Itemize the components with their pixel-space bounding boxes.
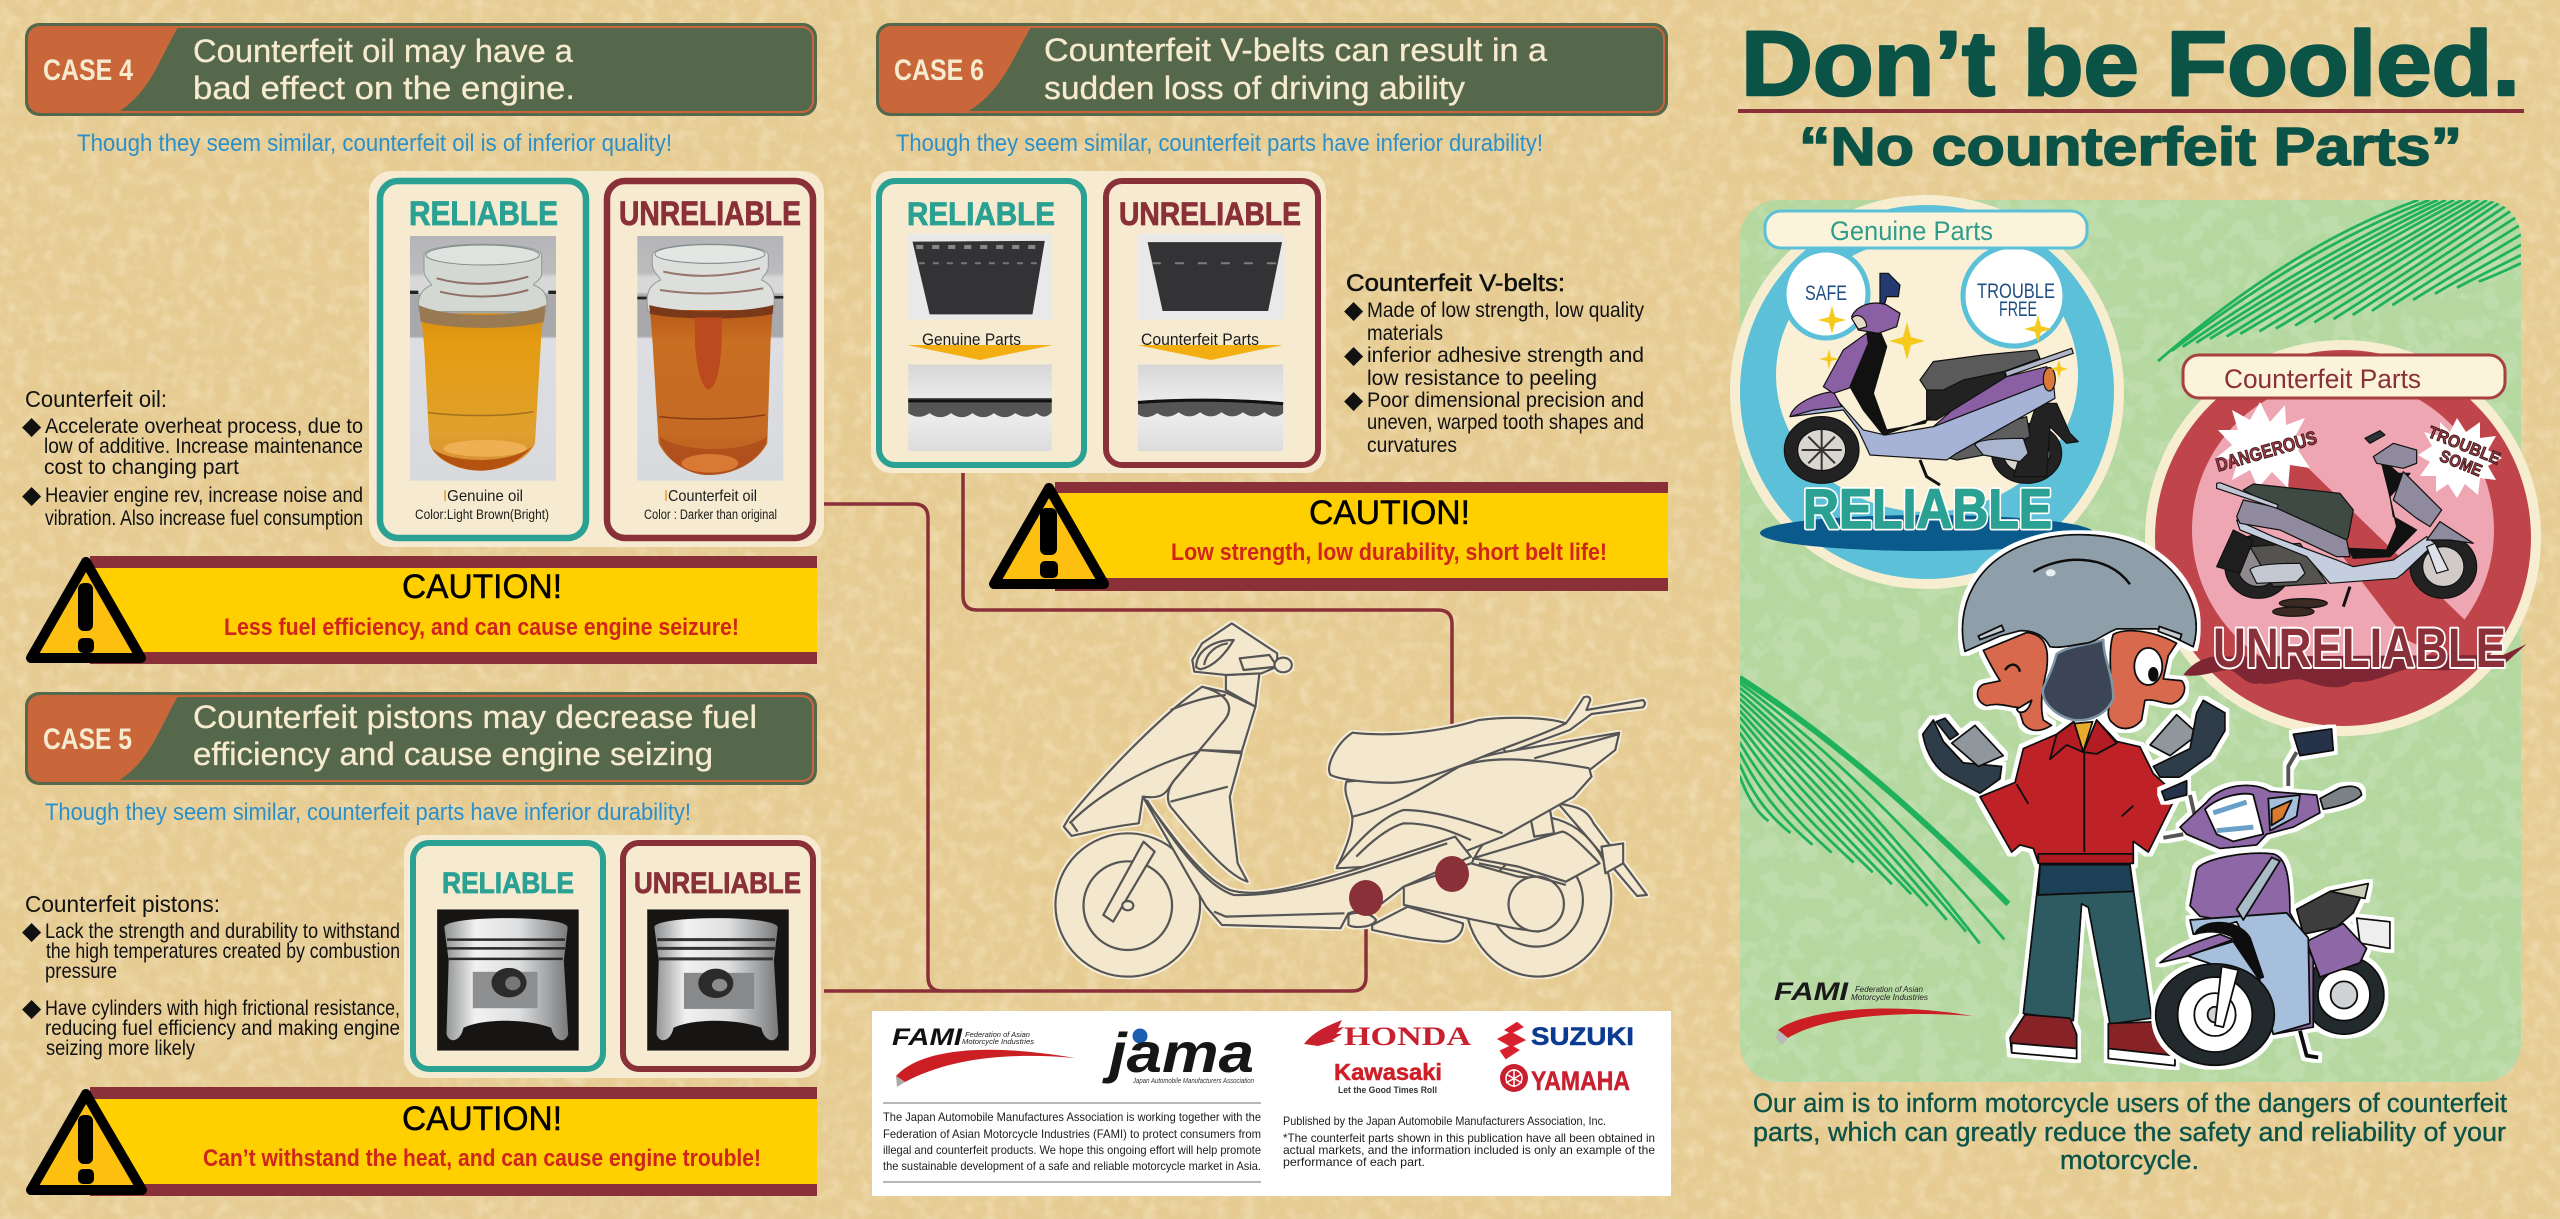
comparison panel: oil: [369, 171, 824, 547]
case 6 banner: Counterfeit V-belts can result in a: [1044, 32, 1547, 68]
gloves holding pistons: [1923, 700, 2225, 793]
text: counterfeit oil: ◆: [22, 412, 42, 440]
case 5 subheading: Though they seem similar, counterfeit parts have inferior durability!: [45, 799, 691, 826]
subtitle: “No counterfeit Parts”: [1799, 117, 2462, 177]
panel: case 6: [871, 23, 1668, 591]
text: counterfeit oil: Accelerate overheat process, due to: [45, 415, 363, 438]
case 6 banner: [876, 23, 1668, 116]
photo: genuine belt cross-section: [908, 234, 1052, 320]
icon: sparkles: [1818, 306, 2068, 378]
text: counterfeit v-belts: inferior adhesive strength and: [1367, 344, 1644, 367]
text: counterfeit v-belts: [1344, 270, 1644, 457]
logo and publisher panel: [872, 1011, 1671, 1196]
logo: JAMA: jama: [1101, 1021, 1254, 1084]
photo: counterfeit piston: [647, 909, 789, 1051]
closing statement: parts, which can greatly reduce the safety and reliability of your: [1753, 1117, 2506, 1147]
logo: Kawasaki: Kawasaki: [1334, 1059, 1442, 1085]
caution bar case 5: Can’t withstand the heat, and can cause engine trouble!: [203, 1145, 761, 1172]
head and helmet: [1962, 535, 2196, 730]
palm leaf: bottom left: [1739, 678, 2008, 943]
text: counterfeit oil: Counterfeit oil:: [25, 386, 167, 412]
burst: troublesome: TROUBLE: [2425, 422, 2503, 469]
text: publisher note: *The counterfeit parts shown in this publication have all been obtained in: [1283, 1131, 1655, 1145]
comparison panel: oil: Color:Light Brown(Bright): [415, 507, 549, 522]
text: association statement: The Japan Automobile Manufactures Association is working together with the: [883, 1110, 1261, 1124]
text: publisher note: Published by the Japan Automobile Manufacturers Association, Inc.: [1283, 1114, 1606, 1128]
case 4 banner: Counterfeit oil may have a: [193, 33, 573, 69]
text: counterfeit pistons: ◆: [22, 917, 42, 945]
text: counterfeit oil: low of additive. Increase maintenance: [44, 435, 363, 458]
text: counterfeit pistons: Lack the strength and durability to withstand: [45, 920, 400, 943]
icon: warning triangle: [31, 562, 141, 658]
burst: dangerous: DANGEROUS: [2214, 428, 2320, 477]
photo: genuine belt side: [908, 365, 1052, 451]
caution bar case 4: [31, 556, 817, 664]
text: publisher note: performance of each part.: [1283, 1155, 1425, 1169]
circle: genuine parts: [1730, 195, 2124, 589]
text: counterfeit v-belts: materials: [1367, 322, 1443, 345]
illustration panel: [1730, 195, 2541, 1082]
comparison panel: v-belts: UNRELIABLE: [1119, 196, 1301, 232]
genuine parts label: Genuine Parts: [1830, 216, 1993, 246]
logo: FAMI small: [1774, 978, 1973, 1045]
genuine parts label: [1765, 211, 2087, 248]
caution bar case 6: CAUTION!: [1309, 494, 1470, 532]
text: counterfeit v-belts: low resistance to peeling: [1367, 367, 1597, 390]
text: counterfeit pistons: [22, 891, 400, 1060]
text: association statement: illegal and counterfeit products. We hope this ongoing effort will help promote: [883, 1143, 1261, 1157]
burst: troublesome: SOME: [2437, 446, 2485, 480]
caution bar case 4: Less fuel efficiency, and can cause engine seizure!: [224, 614, 739, 641]
text: counterfeit pistons: Counterfeit pistons:: [25, 891, 220, 917]
text: counterfeit oil: cost to changing part: [44, 456, 239, 479]
text: publisher note: [1283, 1114, 1655, 1169]
comparison panel: pistons: [404, 835, 821, 1078]
case 5 banner: Counterfeit pistons may decrease fuel: [193, 699, 757, 735]
caution bar case 5: CAUTION!: [402, 1100, 562, 1138]
connector lines: [824, 473, 1452, 991]
purple scooter: [1784, 273, 2078, 485]
prohibition slash: [2263, 453, 2468, 660]
comparison panel: v-belts: Counterfeit Parts: [1141, 330, 1259, 349]
text: counterfeit v-belts: ◆: [1344, 341, 1364, 369]
logo: HONDA: HONDA: [1344, 1022, 1471, 1051]
bubble: trouble free: [1963, 246, 2065, 346]
comparison panel: v-belts: Genuine Parts: [922, 330, 1021, 349]
palm leaf: top right: [2158, 200, 2521, 361]
caution bar case 4: CAUTION!: [402, 568, 562, 606]
case 4 banner: bad effect on the engine.: [193, 70, 575, 106]
title: Don’t be Fooled.: [1741, 13, 2520, 115]
logo: Kawasaki: Let the Good Times Roll: [1338, 1085, 1437, 1096]
text: counterfeit oil: Heavier engine rev, increase noise and: [45, 484, 363, 507]
reliable stamp: RELIABLE: [1803, 477, 2052, 540]
reliable stamp: RELIABLE: [1803, 477, 2052, 540]
case 6 subheading: Though they seem similar, counterfeit parts have inferior durability!: [896, 130, 1543, 157]
scooter outline diagram: [1055, 623, 1647, 977]
logo: FAMI: Motorcycle Industries: [962, 1037, 1034, 1046]
caution bar case 5: [31, 1087, 817, 1196]
text: association statement: Federation of Asian Motorcycle Industries (FAMI) to protect consumers from: [883, 1127, 1261, 1141]
icon: warning triangle: [994, 488, 1104, 584]
bubble: safe: SAFE: [1805, 282, 1847, 305]
burst: dangerous: [2214, 402, 2320, 488]
logo: FAMI small: FAMI: [1774, 978, 1849, 1006]
case 5 banner: efficiency and cause engine seizing: [193, 736, 713, 772]
text: counterfeit pistons: seizing more likely: [46, 1037, 195, 1060]
arrow: counterfeit: [1137, 345, 1283, 360]
logo: FAMI: Federation of Asian: [965, 1030, 1030, 1039]
small purple scooter: [2156, 729, 2390, 1065]
circle: counterfeit parts: [2145, 340, 2541, 736]
comparison panel: oil: Color : Darker than original: [644, 507, 777, 522]
logo: YAMAHA: [1500, 1064, 1630, 1096]
closing statement: Our aim is to inform motorcycle users of the dangers of counterfeit: [1753, 1088, 2508, 1118]
logo: FAMI small: Motorcycle Industries: [1851, 993, 1928, 1002]
comparison panel: pistons: UNRELIABLE: [634, 867, 801, 900]
logo: Kawasaki: [1334, 1059, 1442, 1096]
bubble: trouble free: TROUBLE: [1977, 280, 2055, 303]
text: counterfeit pistons: the high temperatures created by combustion: [46, 940, 400, 963]
text: counterfeit pistons: reducing fuel efficiency and making engine: [45, 1017, 400, 1040]
photo: counterfeit belt cross-section: [1138, 234, 1283, 320]
counterfeit parts label: [2183, 355, 2505, 398]
comparison panel: oil: IGenuine oil: [443, 488, 523, 505]
comparison panel: oil: UNRELIABLE: [619, 195, 801, 233]
text: counterfeit v-belts: uneven, warped tooth shapes and: [1367, 411, 1644, 434]
caution bar case 6: [994, 482, 1668, 591]
text: association statement: [883, 1110, 1261, 1173]
text: counterfeit v-belts: Counterfeit V-belts:: [1346, 270, 1565, 297]
case 4 banner: CASE 4: [43, 54, 133, 87]
text: publisher note: actual markets, and the information included is only an example of the: [1283, 1143, 1655, 1157]
comparison panel: pistons: RELIABLE: [442, 867, 574, 900]
panel: case 4: [22, 23, 824, 664]
logo: FAMI: [892, 1024, 1075, 1087]
logo: YAMAHA: YAMAHA: [1531, 1066, 1630, 1096]
case 6 banner: CASE 6: [894, 54, 984, 87]
closing statement: [1753, 1088, 2508, 1175]
pants and shoes: [2010, 865, 2175, 1066]
text: counterfeit pistons: pressure: [45, 960, 117, 983]
photo: counterfeit oil jar: [637, 236, 783, 481]
text: counterfeit v-belts: ◆: [1344, 296, 1364, 324]
comparison panel: oil: RELIABLE: [409, 195, 558, 233]
text: counterfeit pistons: ◆: [22, 994, 42, 1022]
connector dots: [1349, 856, 1469, 916]
text: counterfeit v-belts: curvatures: [1367, 434, 1457, 457]
text: counterfeit v-belts: ◆: [1344, 386, 1364, 414]
burst: troublesome: [2418, 418, 2503, 498]
case 5 banner: CASE 5: [43, 723, 132, 756]
text: counterfeit oil: vibration. Also increase fuel consumption: [45, 507, 363, 530]
rider character: [1923, 535, 2225, 1066]
case 5 banner: [25, 692, 817, 785]
jacket: [1980, 720, 2177, 864]
logo: FAMI small: Federation of Asian: [1855, 985, 1924, 994]
logo: JAMA: Japan Automobile Manufacturers Association: [1132, 1078, 1254, 1085]
case 4 banner: [25, 23, 817, 116]
closing statement: motorcycle.: [2060, 1145, 2199, 1175]
arrow: genuine: [907, 345, 1053, 360]
logo: SUZUKI: SUZUKI: [1531, 1023, 1634, 1051]
bubble: trouble free: FREE: [1999, 298, 2037, 321]
photo: genuine piston: [437, 909, 579, 1051]
bubble: safe: [1784, 250, 1868, 338]
photo: genuine oil jar: [410, 236, 556, 481]
logo: HONDA: [1304, 1020, 1471, 1051]
comparison panel: v-belts: [871, 171, 1326, 473]
comparison panel: oil: ICounterfeit oil: [664, 488, 757, 505]
icon: warning triangle: [31, 1094, 142, 1190]
title rule: [1738, 109, 2524, 113]
comparison panel: v-belts: RELIABLE: [907, 196, 1055, 232]
text: counterfeit oil: ◆: [22, 481, 42, 509]
text: counterfeit v-belts: Poor dimensional precision and: [1367, 389, 1644, 412]
case 6 banner: sudden loss of driving ability: [1044, 70, 1465, 106]
photo: counterfeit belt side: [1138, 365, 1283, 451]
caution bar case 6: Low strength, low durability, short belt life!: [1171, 539, 1607, 566]
text: counterfeit pistons: Have cylinders with high frictional resistance,: [45, 997, 400, 1020]
case 4 subheading: Though they seem similar, counterfeit oil is of inferior quality!: [77, 130, 672, 157]
logo: FAMI: FAMI: [892, 1024, 964, 1051]
text: counterfeit v-belts: Made of low strength, low quality: [1367, 299, 1644, 322]
panel: case 5: [22, 692, 821, 1196]
text: counterfeit oil: [22, 386, 363, 530]
counterfeit parts label: Counterfeit Parts: [2224, 364, 2421, 394]
broken scooter: [2217, 431, 2477, 616]
logo: SUZUKI: [1499, 1023, 1634, 1058]
text: association statement: the sustainable development of a safe and reliable motorcycle market in Asia.: [883, 1159, 1261, 1173]
